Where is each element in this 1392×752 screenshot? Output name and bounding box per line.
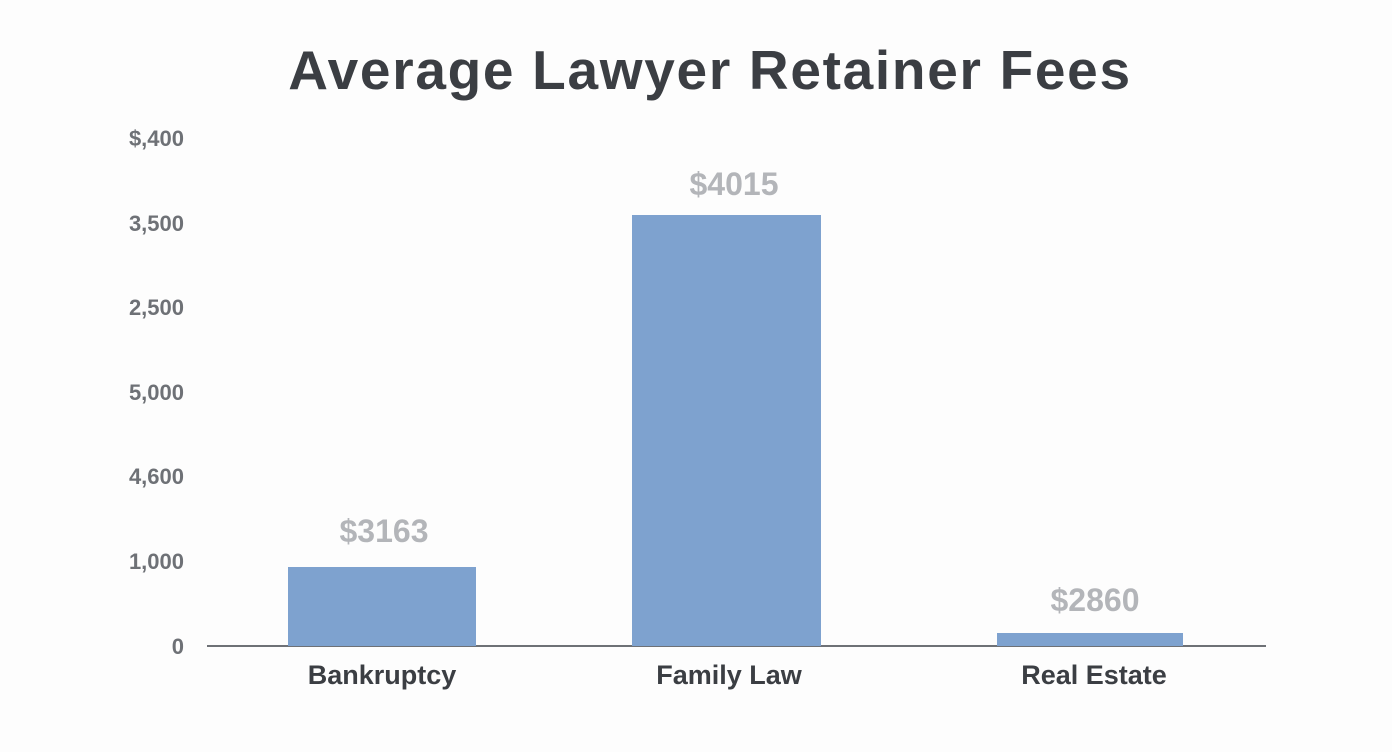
title: Average Lawyer Retainer Fees bbox=[288, 39, 1132, 101]
x axis line bbox=[207, 645, 1266, 647]
value label: Real Estate: $2860 bbox=[1050, 582, 1139, 618]
y axis labels: $,400 bbox=[129, 126, 184, 151]
category labels bbox=[308, 660, 1167, 690]
category labels: Family Law bbox=[656, 660, 802, 690]
y axis labels: 1,000 bbox=[129, 549, 184, 574]
y axis labels: 4,600 bbox=[129, 464, 184, 489]
value label: Family Law: $4015 bbox=[690, 166, 778, 202]
y axis labels bbox=[129, 126, 184, 659]
y axis labels: 0 bbox=[172, 634, 184, 659]
bar: Bankruptcy bbox=[288, 567, 476, 646]
category labels: Bankruptcy bbox=[308, 660, 456, 690]
y axis labels: 2,500 bbox=[129, 295, 184, 320]
value label: Bankruptcy: $3163 bbox=[340, 513, 428, 549]
category labels: Real Estate bbox=[1021, 660, 1167, 690]
bar: Family Law bbox=[632, 215, 821, 646]
y axis labels: 3,500 bbox=[129, 211, 184, 236]
bar: Real Estate bbox=[997, 633, 1183, 646]
y axis labels: 5,000 bbox=[129, 380, 184, 405]
